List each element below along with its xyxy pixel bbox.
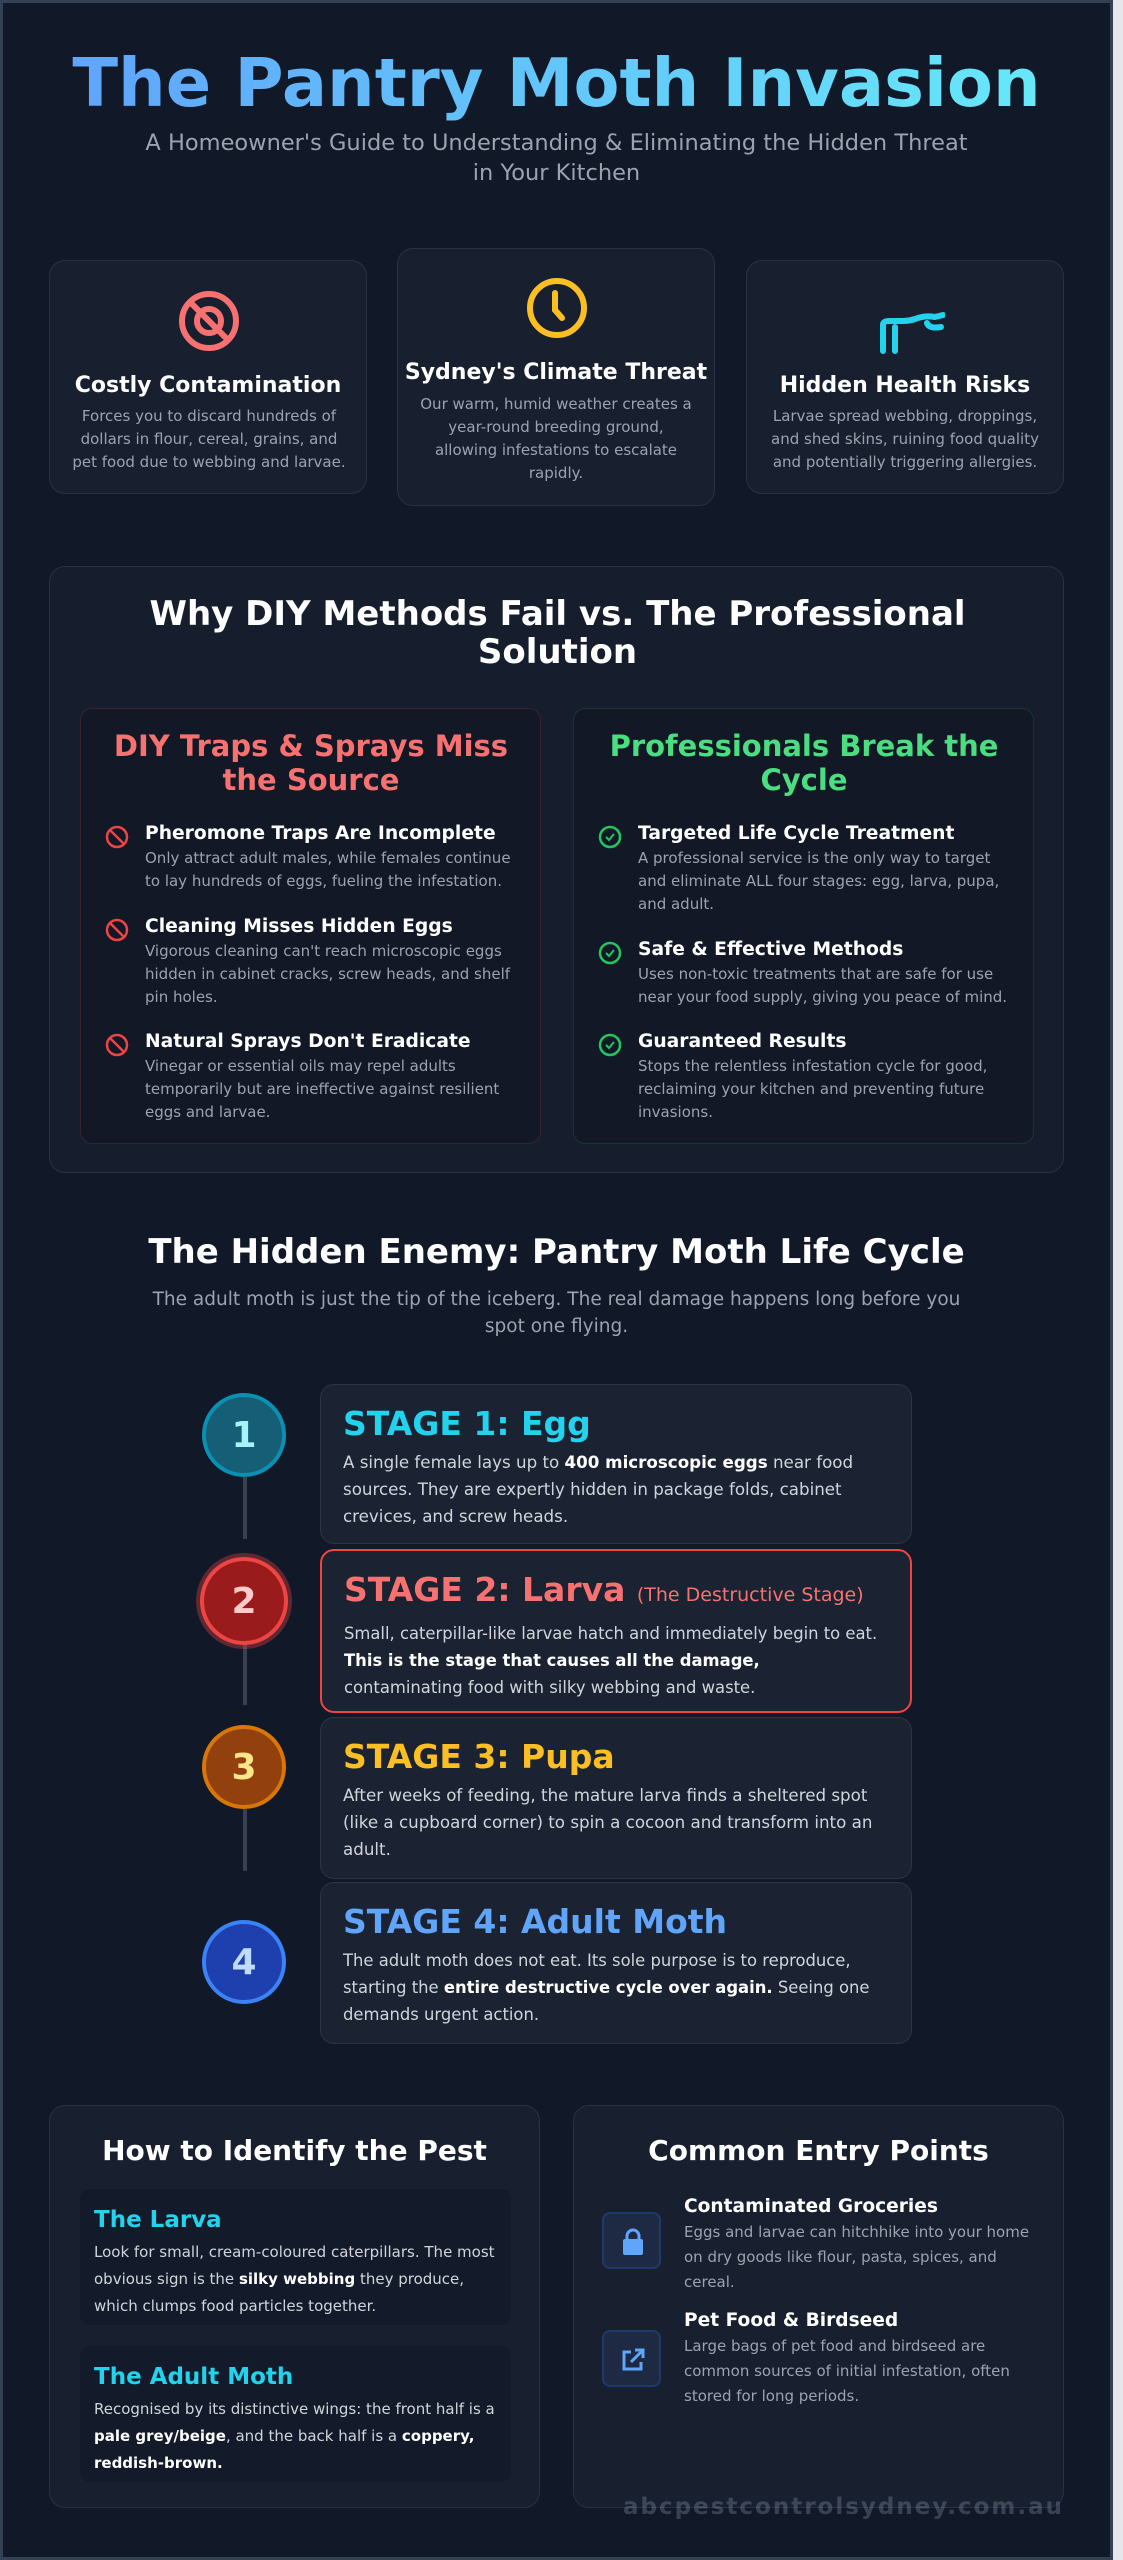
box: adult moth: Recognised by its distinctive wings: the front half is a pale grey/beige, and the back half is a coppery, reddish-brown.	[94, 2400, 495, 2472]
item: safe: Uses non-toxic treatments that are safe for use near your food supply, giving you peace of mind.	[638, 965, 1007, 1006]
item: pheromone	[106, 823, 511, 890]
item: groceries: Eggs and larvae can hitchhike into your home on dry goods like flour, pasta, spices, and cereal.	[684, 2223, 1029, 2291]
icon: clock	[527, 278, 587, 338]
panel: entry points	[573, 2105, 1064, 2508]
stage 4 card: STAGE 4: Adult Moth	[343, 1902, 727, 1941]
stage 3 circle	[202, 1725, 286, 1809]
item: cleaning	[106, 916, 510, 1006]
card title: Costly Contamination	[75, 373, 341, 398]
card text: Forces you to discard hundreds of dollars in flour, cereal, grains, and	[81, 407, 337, 448]
item: safe: Safe & Effective Methods	[638, 939, 903, 960]
panel: DIY vs professional	[49, 566, 1064, 1173]
box: adult moth: The Adult Moth	[94, 2364, 293, 2390]
timeline connectors	[243, 1477, 247, 1539]
item: pet food: Pet Food & Birdseed	[684, 2310, 898, 2331]
life cycle heading: The Hidden Enemy: Pantry Moth Life Cycle	[148, 1232, 965, 1272]
sub-panel: DIY	[80, 708, 541, 1144]
icon: no symbol	[179, 291, 239, 351]
item: groceries	[602, 2196, 1029, 2291]
stage 1 card: A single female lays up to 400 microscopic eggs near food sources. They are expertly hidden in package folds, cabinet crevices, and screw heads.	[343, 1452, 853, 1526]
life cycle subtitle: The adult moth is just the tip of the iceberg. The real damage happens long before you spot one flying.	[153, 1289, 960, 1337]
stage 2 circle: 2	[231, 1580, 257, 1622]
stage 3 card: After weeks of feeding, the mature larva finds a sheltered spot (like a cupboard corner) to spin a cocoon and transform into an adult.	[343, 1785, 872, 1859]
item: pet food	[602, 2310, 1010, 2405]
panel heading: Why DIY Methods Fail vs. The Professional Solution	[149, 594, 966, 672]
card: climate threat	[397, 248, 715, 506]
entry heading: Common Entry Points	[648, 2134, 989, 2167]
stage 1 circle: 1	[231, 1414, 257, 1456]
title: The Pantry Moth Invasion	[72, 44, 1041, 122]
card: costly contamination	[49, 260, 367, 494]
pro heading: Professionals Break the Cycle	[610, 729, 998, 797]
stage 1 card: STAGE 1: Egg	[343, 1404, 591, 1443]
item: guaranteed: Guaranteed Results	[638, 1031, 847, 1052]
stage 3 card: STAGE 3: Pupa	[343, 1737, 615, 1776]
subtitle: A Homeowner's Guide to Understanding & Eliminating the Hidden Threat in Your Kitchen	[145, 130, 968, 186]
box: larva	[80, 2189, 511, 2325]
card text: pet food due to webbing and larvae.	[72, 453, 346, 471]
DIY heading: DIY Traps & Sprays Miss the Source	[114, 729, 508, 797]
item: targeted: A professional service is the only way to target and eliminate ALL four stages: egg, larva, pupa, and adult.	[638, 849, 999, 913]
item: groceries: Contaminated Groceries	[684, 2196, 938, 2217]
card: health risks	[746, 260, 1064, 494]
item: targeted	[598, 823, 999, 913]
card text: Our warm, humid weather creates a year-round breeding ground, allowing infestations to escalate rapidly.	[420, 395, 692, 482]
watermark: abcpestcontrolsydney.com.au	[623, 2494, 1064, 2520]
sub-panel: professional	[573, 708, 1034, 1144]
item: pheromone: Pheromone Traps Are Incomplete	[145, 823, 496, 844]
stage 1 circle	[202, 1393, 286, 1477]
stage 3 circle: 3	[231, 1746, 257, 1788]
stage 4 card	[320, 1882, 912, 2044]
item: cleaning: Vigorous cleaning can't reach microscopic eggs hidden in cabinet cracks, screw heads, and shelf pin holes.	[145, 942, 510, 1006]
item: pheromone: Only attract adult males, while females continue to lay hundreds of eggs, fueling the infestation.	[145, 849, 511, 890]
item: natural sprays: Vinegar or essential oils may repel adults temporarily but are ineffective against resilient eggs and larvae.	[145, 1057, 499, 1121]
card title: Sydney's Climate Threat	[405, 360, 707, 385]
card text	[72, 407, 346, 471]
panel: identify	[49, 2105, 540, 2508]
stage 2 card: contaminating food with silky webbing and waste.	[344, 1678, 755, 1697]
item: cleaning: Cleaning Misses Hidden Eggs	[145, 916, 453, 937]
stage 2 card: Small, caterpillar-like larvae hatch and immediately begin to eat. This is the stage that causes all the damage,	[344, 1624, 877, 1670]
stage 4 circle	[202, 1920, 286, 2004]
icon: larva squiggle	[880, 312, 945, 354]
box: larva: The Larva	[94, 2207, 222, 2233]
item: guaranteed: Stops the relentless infestation cycle for good, reclaiming your kitchen and preventing future invasions.	[638, 1057, 987, 1121]
item: safe	[598, 939, 1007, 1006]
stage 3 card	[320, 1717, 912, 1879]
stage 2 card	[320, 1549, 912, 1713]
item: natural sprays	[106, 1031, 499, 1121]
stage 4 circle: 4	[231, 1942, 257, 1982]
card title: Hidden Health Risks	[780, 373, 1030, 398]
item: targeted: Targeted Life Cycle Treatment	[638, 823, 954, 844]
item: natural sprays: Natural Sprays Don't Eradicate	[145, 1031, 471, 1052]
stage 4 card: The adult moth does not eat. Its sole purpose is to reproduce, starting the entire destructive cycle over again. Seeing one demands urgent action.	[343, 1951, 869, 2024]
box: larva: Look for small, cream-coloured caterpillars. The most obvious sign is the silky webbing they produce, which clumps food particles together.	[94, 2243, 495, 2315]
stage 1 card	[320, 1384, 912, 1544]
identify heading: How to Identify the Pest	[102, 2134, 487, 2167]
card text: Larvae spread webbing, droppings, and shed skins, ruining food quality and potentially triggering allergies.	[771, 407, 1039, 471]
stage 2 circle	[200, 1557, 288, 1645]
stage 2 card: STAGE 2: Larva (The Destructive Stage)	[344, 1570, 864, 1609]
box: adult moth	[80, 2346, 511, 2482]
item: pet food: Large bags of pet food and birdseed are common sources of initial infestation, often stored for long periods.	[684, 2337, 1010, 2405]
item: guaranteed	[598, 1031, 987, 1121]
